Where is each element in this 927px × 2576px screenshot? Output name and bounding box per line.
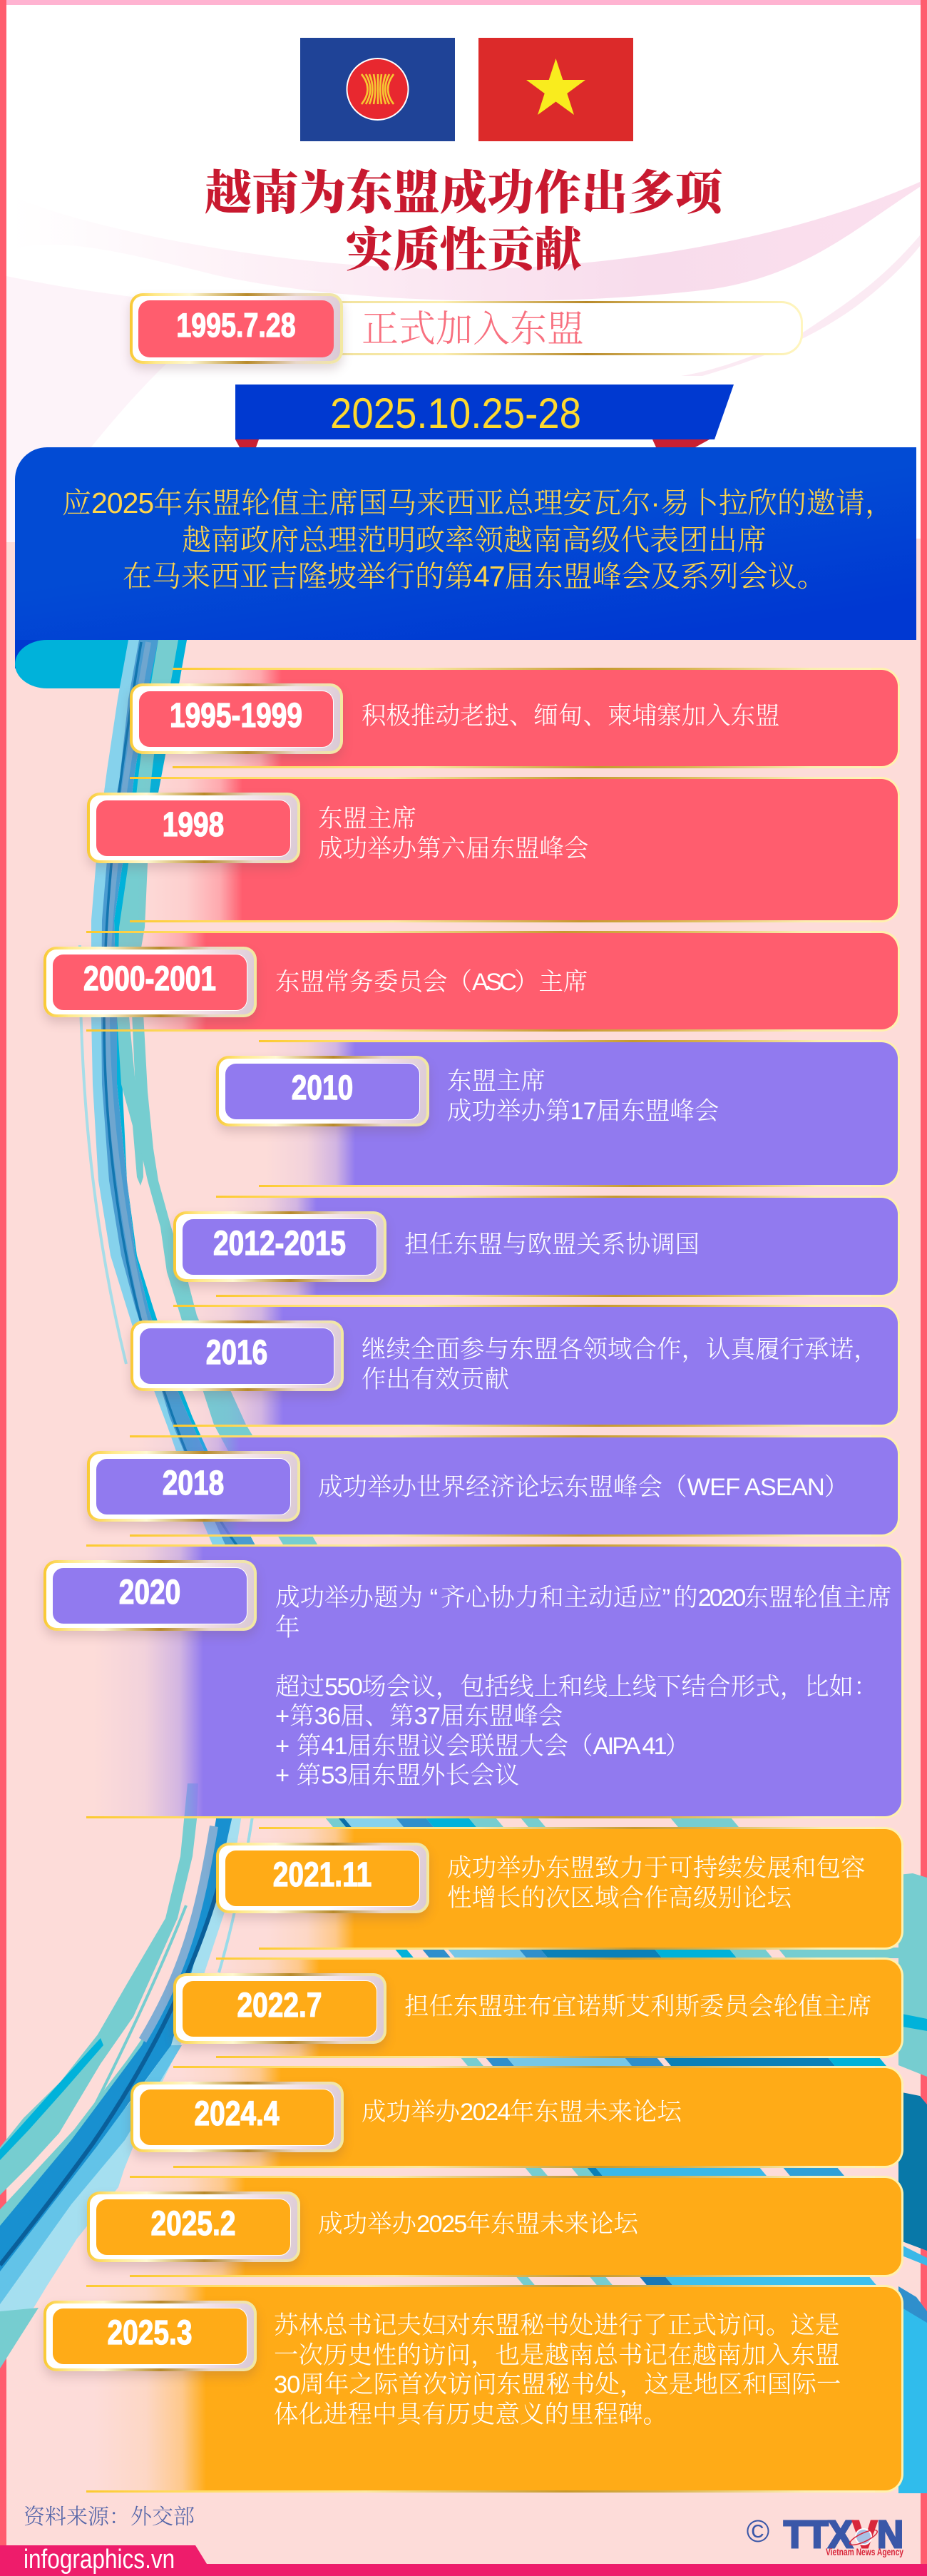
source note: 资料来源：外交部 <box>24 2505 195 2529</box>
row text: 一次历史性的访问，也是越南总书记在越南加入东盟 <box>274 2341 840 2368</box>
row text <box>318 805 589 862</box>
row text: 东盟主席 <box>318 805 416 833</box>
timeline row: 2010 <box>212 1040 900 1187</box>
title <box>205 155 722 280</box>
banner text bar <box>322 301 803 355</box>
website label: infographics.vn <box>24 2545 175 2575</box>
date badge: 2018 <box>163 1465 224 1502</box>
date badge: 2012-2015 <box>213 1225 346 1263</box>
timeline row: 2021.11 <box>214 1827 903 1950</box>
timeline row: 1998 <box>84 777 900 922</box>
row text: 成功举办2024年东盟未来论坛 <box>362 2099 682 2126</box>
date ribbon: 2025.10.25-28 <box>330 390 581 437</box>
date badge <box>87 793 300 863</box>
date badge <box>87 1451 300 1522</box>
row text <box>274 2312 841 2428</box>
flag: ASEAN <box>300 38 455 141</box>
date badge <box>130 683 343 754</box>
date badge <box>216 1056 429 1126</box>
row text: 担任东盟驻布宜诺斯艾利斯委员会轮值主席 <box>404 1993 871 2020</box>
row text: 东盟常务委员会（ASC）主席 <box>275 969 588 996</box>
row text: 东盟主席 <box>447 1068 546 1095</box>
date badge: 1995.7.28 <box>176 306 296 344</box>
date badge: 2025.3 <box>108 2314 192 2352</box>
banner text: 正式加入东盟 <box>362 309 584 350</box>
accession date banner <box>126 293 803 374</box>
date badge: 2020 <box>119 1574 180 1612</box>
row text <box>447 1068 719 1124</box>
flag: Vietnam <box>478 38 633 141</box>
timeline row: 2016 <box>127 1305 900 1427</box>
date badge <box>130 2082 344 2152</box>
title: 实质性贡献 <box>346 212 581 280</box>
intro panel <box>15 447 916 640</box>
row text: 性增长的次区域合作高级别论坛 <box>447 1885 792 1912</box>
timeline row: 2022.7 <box>170 1958 903 2058</box>
timeline row: 2018 <box>84 1435 900 1537</box>
intro text: 应2025年东盟轮值主席国马来西亚总理安瓦尔·易卜拉欣的邀请， <box>62 487 894 519</box>
timeline row: 2025.2 <box>83 2176 903 2277</box>
date badge <box>87 2191 300 2262</box>
row text: +第36届、第37届东盟峰会 <box>275 1703 563 1730</box>
row text: 体化进程中具有历史意义的里程碑。 <box>274 2401 667 2428</box>
row text: 30周年之际首次访问东盟秘书处，这是地区和国际一 <box>274 2371 841 2398</box>
row text: + 第53届东盟外长会议 <box>275 1762 519 1789</box>
row text: 成功举办第17届东盟峰会 <box>447 1097 719 1124</box>
row text: 成功举办第六届东盟峰会 <box>318 835 589 862</box>
timeline row: 2000-2001 <box>40 931 900 1032</box>
timeline row: 2012-2015 <box>170 1196 900 1297</box>
intro text: 在马来西亚吉隆坡举行的第47届东盟峰会及系列会议。 <box>123 560 826 593</box>
date badge: 2025.2 <box>151 2205 235 2243</box>
row text: 成功举办题为 “齐心协力和主动适应”的2020东盟轮值主席 <box>275 1584 891 1612</box>
row text: 苏林总书记夫妇对东盟秘书处进行了正式访问。这是 <box>274 2312 840 2339</box>
date badge: 2024.4 <box>195 2095 279 2133</box>
row text <box>275 1584 891 1789</box>
date badge: 2022.7 <box>237 1987 322 2025</box>
title: 越南为东盟成功作出多项 <box>205 155 722 223</box>
date badge: 2010 <box>292 1069 353 1107</box>
timeline row: 1995-1999 <box>127 668 900 768</box>
date badge <box>173 1973 386 2044</box>
row text: 年 <box>275 1614 299 1641</box>
date badge <box>43 2301 257 2371</box>
date badge: 1995-1999 <box>170 697 302 735</box>
timeline row: 2024.4 <box>127 2066 903 2168</box>
row text <box>362 1336 879 1393</box>
row text <box>447 1855 866 1912</box>
timeline row: 2020 <box>40 1544 903 1818</box>
date badge: 2021.11 <box>273 1856 372 1894</box>
intro text <box>62 487 894 593</box>
date badge <box>43 947 257 1017</box>
date badge <box>173 1211 386 1282</box>
date badge <box>216 1843 429 1913</box>
date badge: 2016 <box>206 1334 267 1372</box>
row text: 成功举办世界经济论坛东盟峰会（WEF ASEAN） <box>318 1474 849 1501</box>
row text: + 第41届东盟议会联盟大会（AIPA 41） <box>275 1732 690 1759</box>
date badge: 1998 <box>163 806 224 844</box>
date badge <box>130 293 343 364</box>
timeline row: 2025.3 <box>40 2285 903 2493</box>
row text: 担任东盟与欧盟关系协调国 <box>404 1231 700 1258</box>
date badge: 2000-2001 <box>83 960 216 998</box>
row text: 超过550场会议，包括线上和线上线下结合形式，比如： <box>275 1674 879 1701</box>
row text: 成功举办2025年东盟未来论坛 <box>318 2211 638 2238</box>
intro text: 越南政府总理范明政率领越南高级代表团出席 <box>182 524 767 556</box>
TTXVN logo: © <box>747 2515 769 2549</box>
row text: 继续全面参与东盟各领域合作，认真履行承诺， <box>362 1336 879 1363</box>
row text: 成功举办东盟致力于可持续发展和包容 <box>447 1855 866 1882</box>
row text: 积极推动老挝、缅甸、柬埔寨加入东盟 <box>362 703 780 730</box>
date ribbon <box>235 385 734 447</box>
date badge <box>130 1320 344 1391</box>
date badge <box>43 1560 257 1631</box>
row text: 作出有效贡献 <box>362 1365 509 1393</box>
